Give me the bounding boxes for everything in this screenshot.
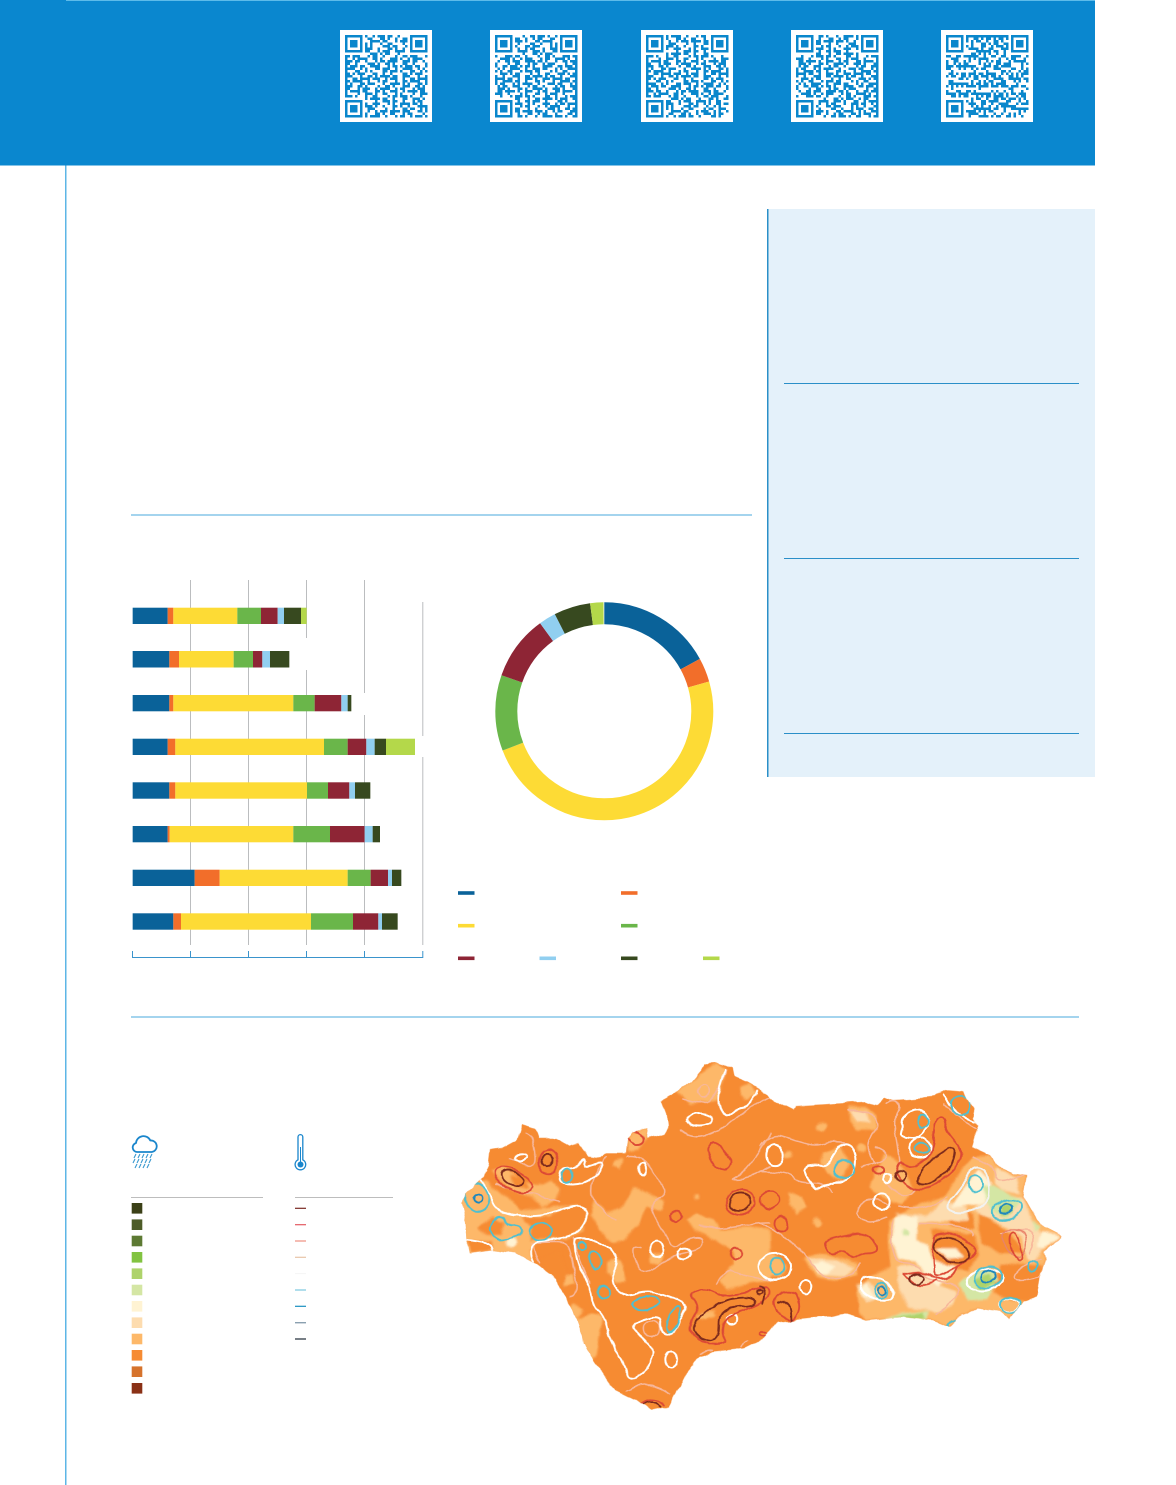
section rule: charts (131, 514, 752, 516)
map contours: white (467, 1070, 1019, 1378)
chart legend (458, 891, 720, 960)
QR code 3 (641, 30, 733, 122)
legend: temperature lines (295, 1197, 393, 1340)
icon: rain cloud (133, 1136, 157, 1168)
section rule: map (131, 1016, 1079, 1018)
left margin rule (65, 165, 66, 1485)
QR code 2 (490, 30, 582, 122)
donut chart (506, 613, 702, 809)
side panel (767, 209, 1095, 777)
map of Andalucía (461, 1062, 1062, 1410)
stacked bar chart (132, 580, 428, 958)
QR code 5 (941, 30, 1033, 122)
map contours: pale (497, 1070, 1040, 1393)
header band (0, 0, 1095, 166)
QR code 1 (340, 30, 432, 122)
map contours: warm (490, 1117, 1027, 1408)
icon: thermometer (295, 1135, 306, 1170)
QR code 4 (791, 30, 883, 122)
map contours: cool (465, 1096, 1037, 1333)
legend: precipitation swatches (131, 1197, 263, 1394)
